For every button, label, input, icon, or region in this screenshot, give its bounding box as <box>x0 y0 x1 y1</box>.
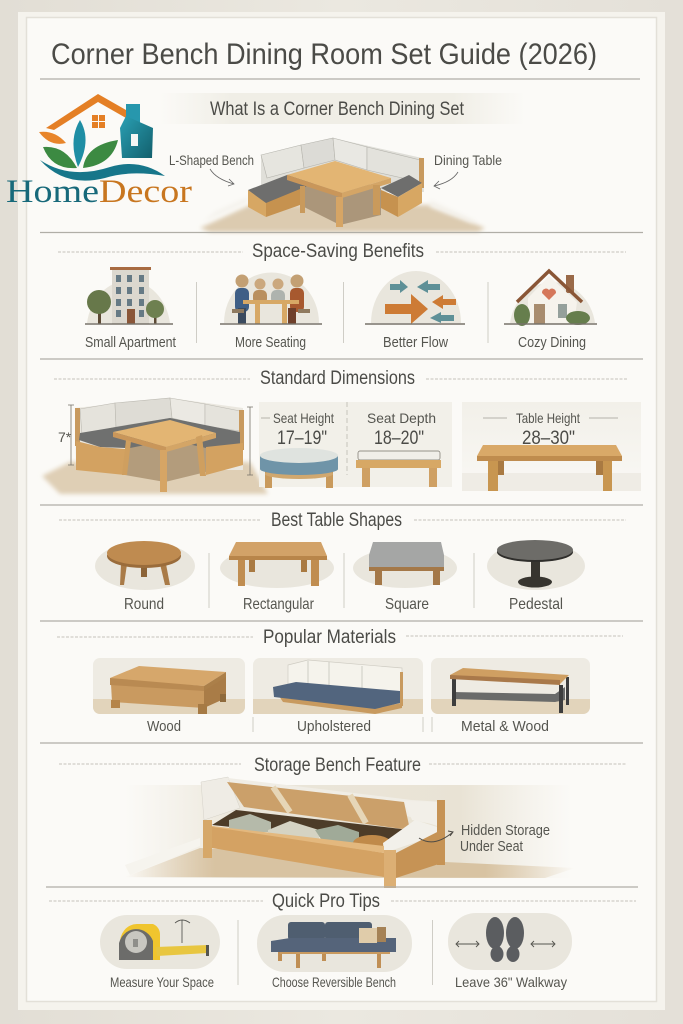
label: round: Round <box>124 596 164 613</box>
label: square: Square <box>385 596 429 613</box>
label: seat height: Seat Height <box>273 410 334 426</box>
label: dining table: Dining Table <box>434 152 502 168</box>
illustration: open storage bench <box>125 777 575 888</box>
label: pedestal: Pedestal <box>509 596 563 613</box>
heading: storage bench feature: Storage Bench Feature <box>254 755 421 776</box>
value: table height: 28–30" <box>522 428 575 449</box>
panel: what is a corner bench dining set <box>160 93 525 232</box>
label: better flow: Better Flow <box>383 334 448 351</box>
panel: quick pro tips <box>49 891 636 990</box>
heading: space-saving benefits: Space-Saving Benefits <box>252 241 424 262</box>
title: Corner Bench Dining Room Set Guide (2026) <box>51 38 597 71</box>
label: cozy dining: Cozy Dining <box>518 334 586 351</box>
value: seat depth: 18–20" <box>374 428 424 449</box>
illustration: bench with dimension lines <box>42 398 268 494</box>
label: measure your space: Measure Your Space <box>110 974 214 990</box>
panel: table height <box>462 402 641 491</box>
heading: popular materials: Popular Materials <box>263 627 396 648</box>
icon: reversible bench sofa <box>257 915 412 972</box>
card: wood <box>93 658 245 735</box>
illustration: corner bench with table <box>200 138 485 232</box>
icon: cozy dining <box>504 271 597 326</box>
label: small apartment: Small Apartment <box>85 334 177 351</box>
panel: popular materials <box>57 627 623 735</box>
icon: pedestal table <box>487 540 585 590</box>
heading: best table shapes: Best Table Shapes <box>271 510 402 531</box>
label: choose reversible bench: Choose Reversible Bench <box>272 974 396 990</box>
icon: better flow <box>365 271 465 324</box>
icon: footprints and arrows <box>448 913 572 970</box>
heading: what is: What Is a Corner Bench Dining Set <box>210 99 465 120</box>
panel: best table shapes <box>59 510 626 613</box>
label: seat depth: Seat Depth <box>367 410 436 426</box>
icon: small apartment <box>85 267 173 324</box>
callout: hidden storage: Under Seat <box>460 838 524 855</box>
heading: quick pro tips: Quick Pro Tips <box>272 891 380 912</box>
icon: rectangular table <box>220 542 334 588</box>
label: table height: Table Height <box>516 410 580 426</box>
label: rectangular: Rectangular <box>243 596 315 613</box>
logo: HomeDecor: Home Decor <box>6 174 192 210</box>
heading: standard dimensions: Standard Dimensions <box>260 368 415 389</box>
value: seat height: 17–19" <box>277 428 327 449</box>
panel: seat dimensions <box>259 402 452 488</box>
label: wood: Wood <box>147 718 181 735</box>
label: dining table <box>434 152 502 189</box>
callout: hidden storage <box>419 822 550 855</box>
label: leave 36 inch walkway: Leave 36" Walkway <box>455 974 567 990</box>
icon: table <box>477 445 622 491</box>
label: width mark: 7* <box>58 429 72 445</box>
panel: storage bench feature <box>59 755 627 888</box>
icon: round table <box>95 541 195 590</box>
callout: hidden storage: Hidden Storage <box>461 822 550 839</box>
panel: standard dimensions <box>42 368 641 494</box>
card: upholstered <box>253 658 423 735</box>
panel: space-saving benefits <box>58 241 626 351</box>
label: upholstered: Upholstered <box>297 718 371 735</box>
label: L-shaped bench: L-Shaped Bench <box>169 152 254 168</box>
label: metal and wood: Metal & Wood <box>461 718 549 735</box>
icon: square table <box>353 542 457 588</box>
section banner <box>160 93 525 124</box>
icon: more seating <box>220 272 322 324</box>
label: more seating: More Seating <box>235 334 306 351</box>
icon: tape measure <box>100 915 220 969</box>
card: metal and wood <box>431 658 590 735</box>
icon: ottoman <box>260 448 338 488</box>
label: L-shaped bench <box>169 152 254 186</box>
icon: bench <box>356 451 441 487</box>
logo: HomeDecor <box>6 94 192 210</box>
